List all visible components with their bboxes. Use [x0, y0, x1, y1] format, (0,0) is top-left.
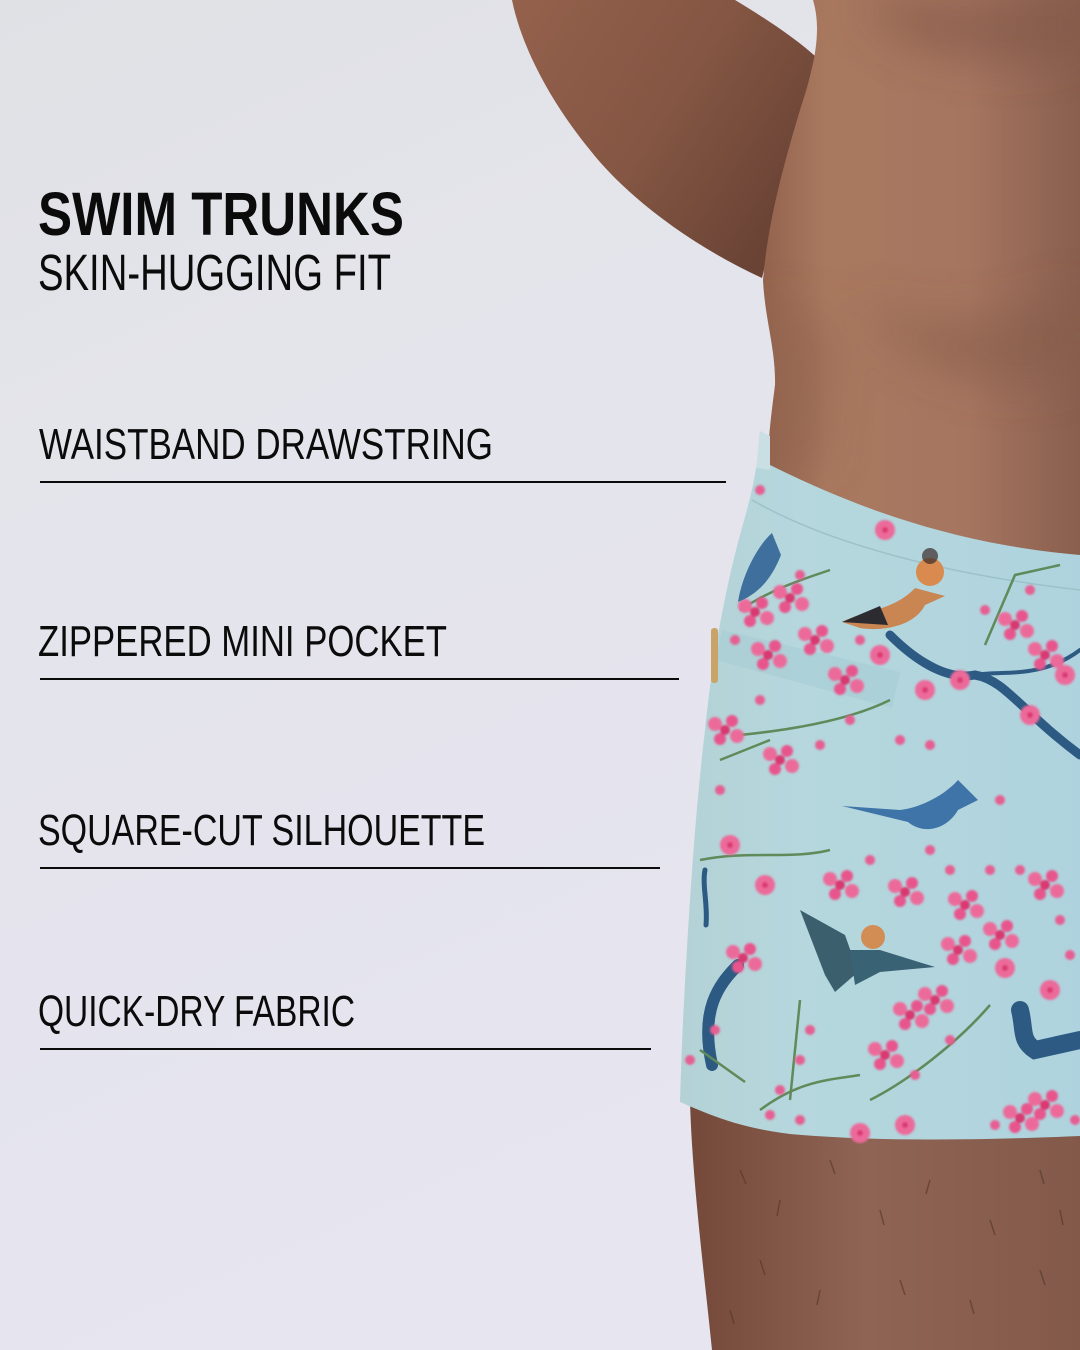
torso shading — [769, 0, 1053, 440]
torso — [763, 0, 1080, 620]
bird: hoopoe lower — [800, 910, 935, 992]
waistband inner edge — [756, 431, 770, 470]
feature: quick-dry fabric: QUICK-DRY FABRIC — [38, 987, 355, 1036]
feature: waistband drawstring: WAISTBAND DRAWSTRING — [39, 420, 493, 469]
waistband seam — [752, 500, 1080, 590]
leg — [690, 1100, 1080, 1350]
arm — [512, 0, 815, 278]
blossoms — [685, 485, 1080, 1143]
feature: zippered mini pocket: ZIPPERED MINI POCKET — [38, 617, 447, 666]
title: SWIM TRUNKS — [38, 180, 404, 248]
branches — [704, 635, 1080, 1065]
pocket — [716, 630, 900, 708]
subtitle: SKIN-HUGGING FIT — [38, 244, 391, 301]
trunks — [680, 431, 1080, 1143]
zipper — [711, 628, 718, 683]
bird: blue jay centre — [842, 780, 978, 829]
bird: hoopoe — [842, 548, 945, 629]
photo: model wearing swim trunks — [512, 0, 1080, 1350]
green twigs — [700, 565, 1060, 1110]
feature: square-cut silhouette: SQUARE-CUT SILHOUETTE — [38, 806, 485, 855]
bird: blue jay left — [738, 533, 781, 602]
trunks fabric — [680, 431, 1080, 1140]
leg hair — [730, 1160, 1063, 1324]
